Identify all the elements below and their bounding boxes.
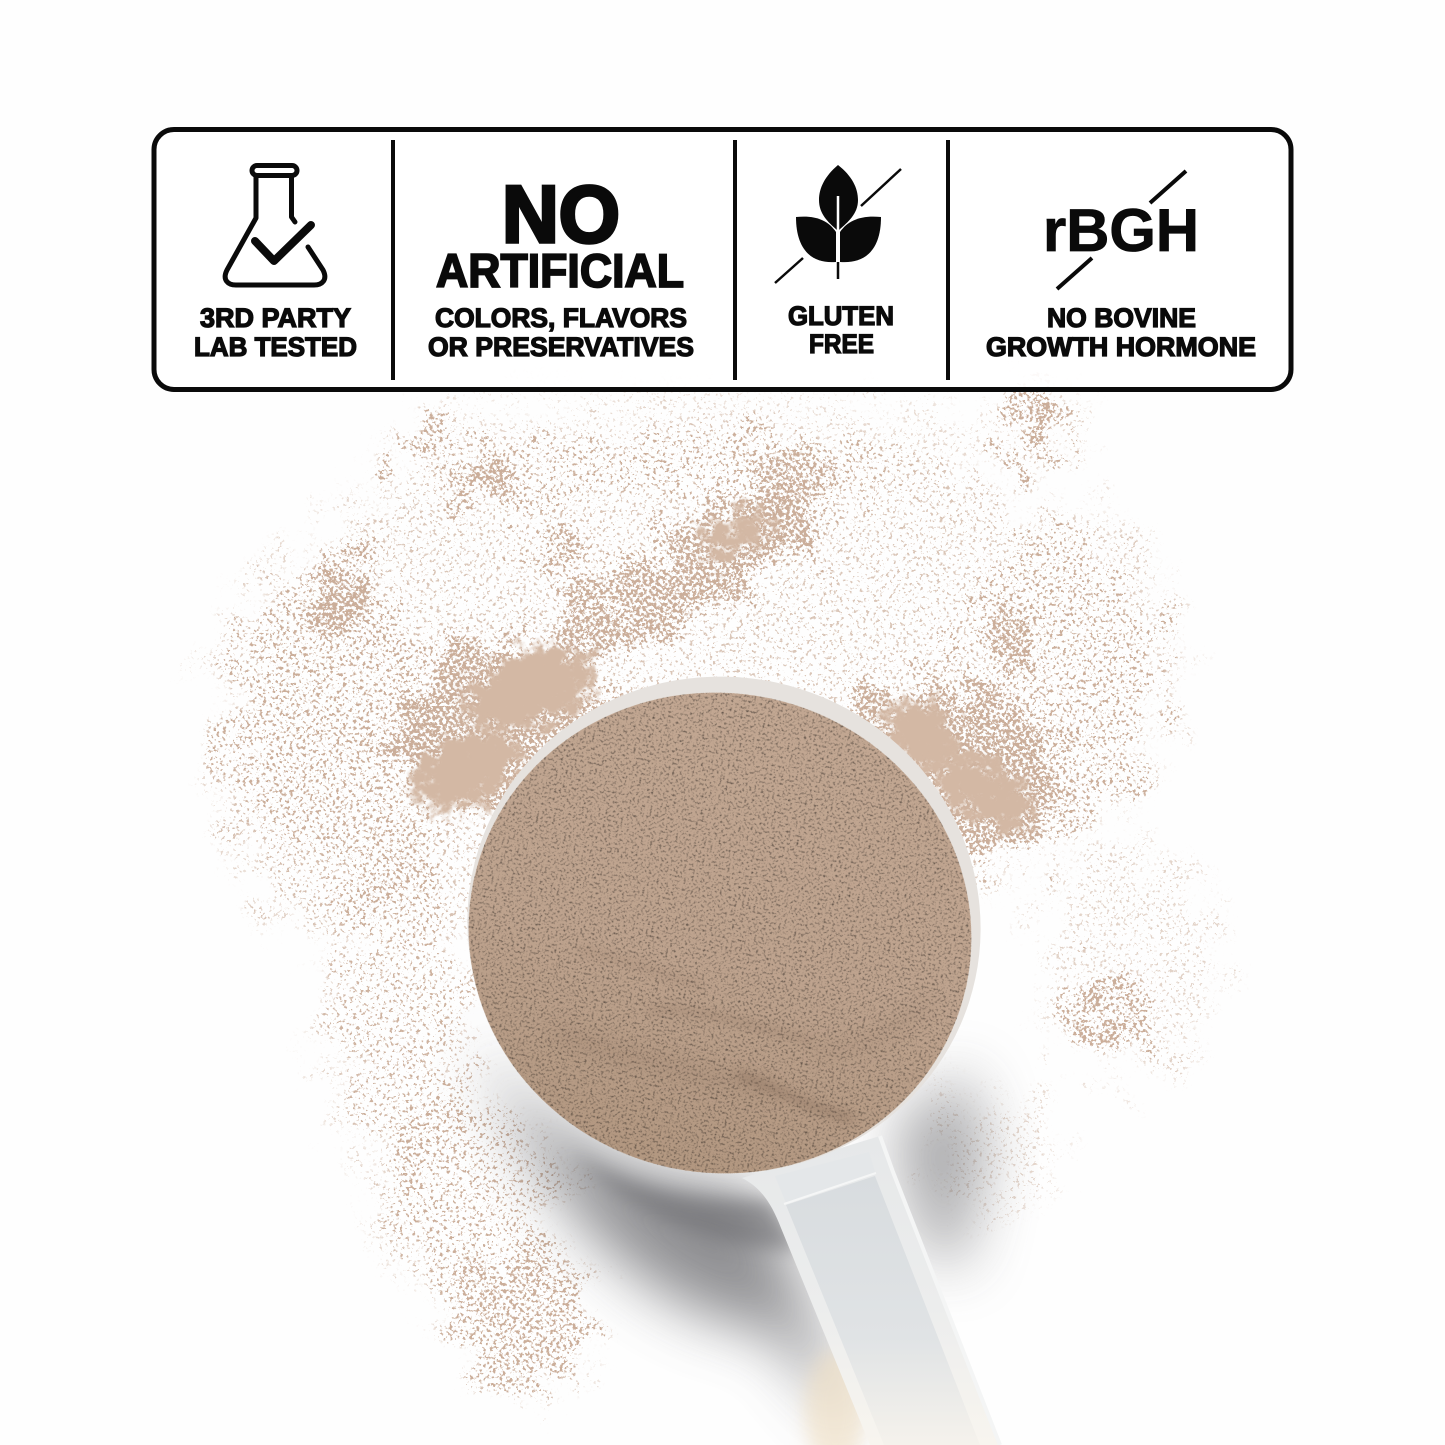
label: COLORS, FLAVORS bbox=[435, 303, 687, 333]
label bbox=[428, 303, 694, 362]
label: FREE bbox=[809, 329, 874, 359]
warm glow below handle bbox=[805, 1350, 865, 1445]
icon: flask with check bbox=[225, 166, 325, 285]
icon: crossed-out leaves bbox=[775, 165, 901, 283]
badge frame bbox=[154, 130, 1291, 390]
label: NO BOVINE bbox=[1047, 303, 1196, 333]
label bbox=[986, 303, 1256, 362]
label bbox=[788, 301, 894, 359]
label: GROWTH HORMONE bbox=[986, 332, 1256, 362]
scoop rim bbox=[421, 629, 1027, 1221]
badge: no artificial bbox=[428, 170, 694, 362]
label: LAB TESTED bbox=[194, 332, 357, 362]
heading: NO bbox=[502, 170, 620, 260]
scoop bbox=[468, 676, 1002, 1445]
scoop shadow bbox=[480, 1030, 985, 1440]
heading bbox=[436, 170, 684, 297]
label: GLUTEN bbox=[788, 301, 894, 331]
label bbox=[194, 303, 357, 362]
badge: no bovine growth hormone bbox=[986, 171, 1256, 362]
icon: crossed-out rBGH: rBGH bbox=[1043, 197, 1199, 264]
heading: ARTIFICIAL bbox=[436, 244, 684, 297]
icon: crossed-out rBGH bbox=[1043, 171, 1199, 289]
badge: 3rd party lab tested bbox=[194, 166, 357, 362]
column dividers bbox=[391, 140, 950, 380]
loose powder scatter bbox=[220, 387, 1220, 1390]
label: 3RD PARTY bbox=[200, 303, 351, 333]
powder ridges bbox=[732, 1040, 852, 1122]
badge strip bbox=[154, 130, 1291, 390]
powder in scoop bbox=[468, 692, 972, 1174]
scoop handle bbox=[742, 1136, 1000, 1445]
dense powder drifts bbox=[399, 504, 1047, 842]
badge: gluten free bbox=[775, 165, 901, 359]
label: OR PRESERVATIVES bbox=[428, 332, 694, 362]
